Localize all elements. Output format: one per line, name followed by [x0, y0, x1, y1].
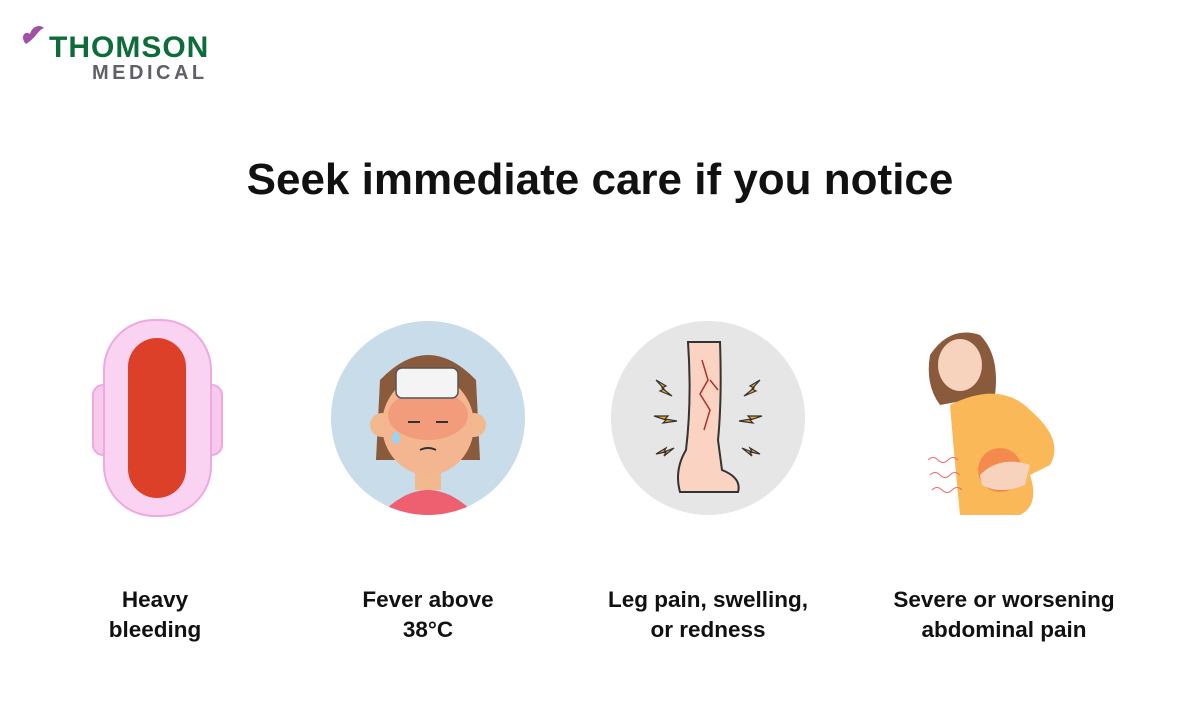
label: abdominal pain: Severe or worsening — [893, 587, 1115, 612]
icon: sanitary pad — [92, 319, 223, 517]
label: abdominal pain: abdominal pain — [921, 617, 1086, 642]
logo text: THOMSON — [49, 31, 209, 64]
icon: butterfly — [23, 26, 44, 44]
icon: woman with abdominal pain — [928, 332, 1054, 515]
label: leg pain: or redness — [650, 617, 766, 642]
label: fever: 38°C — [403, 617, 453, 642]
label: leg pain: Leg pain, swelling, — [608, 587, 808, 612]
label: fever: Fever above — [362, 587, 494, 612]
label: heavy bleeding — [109, 587, 201, 642]
icon: fever child — [331, 321, 525, 515]
icon: leg pain — [611, 321, 805, 515]
title: Seek immediate care if you notice — [247, 155, 953, 204]
logo: MEDICAL — [92, 62, 208, 84]
label: fever — [362, 587, 494, 642]
label: leg pain — [608, 587, 808, 642]
label: heavy bleeding: bleeding — [109, 617, 201, 642]
label: heavy bleeding: Heavy — [122, 587, 188, 612]
logo — [23, 26, 209, 84]
label: abdominal pain — [893, 587, 1115, 642]
